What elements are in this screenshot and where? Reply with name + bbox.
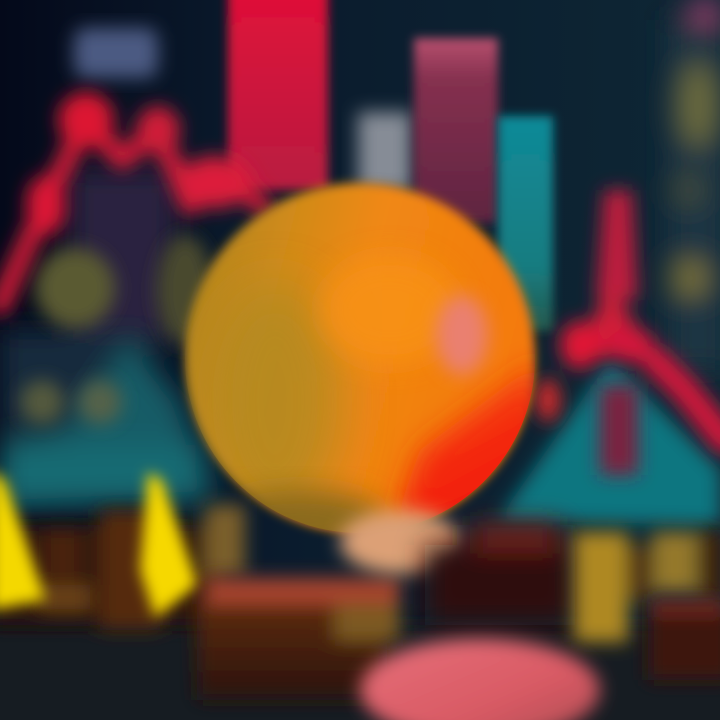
coin lower-right red shading xyxy=(383,354,535,522)
right dark red stack xyxy=(425,525,575,625)
right gold coin stacks xyxy=(574,530,720,642)
grey bar xyxy=(358,112,412,192)
tall red bar xyxy=(228,0,328,190)
right red tree chart xyxy=(536,190,720,475)
table surface xyxy=(0,625,720,720)
left brown coin stack xyxy=(0,505,245,630)
right teal triangle xyxy=(498,360,720,525)
teal bar xyxy=(498,116,553,331)
centre brown coin stack xyxy=(197,578,400,700)
orange coin sphere xyxy=(185,183,560,550)
left red zigzag line xyxy=(0,92,262,305)
yellow triangles xyxy=(0,470,198,618)
right front brown stack xyxy=(648,600,720,680)
pink plate foreground xyxy=(360,638,600,720)
coin bright highlight xyxy=(310,267,447,359)
slate block xyxy=(74,28,158,78)
left chart panel xyxy=(0,170,215,510)
left gold coins xyxy=(20,235,213,424)
right side chart column xyxy=(668,0,720,370)
maroon bar xyxy=(414,38,498,223)
cream coin xyxy=(340,510,460,574)
coin left gold shading xyxy=(205,280,345,520)
coin bottom olive shading xyxy=(247,474,393,532)
coin pink highlight xyxy=(436,295,488,375)
